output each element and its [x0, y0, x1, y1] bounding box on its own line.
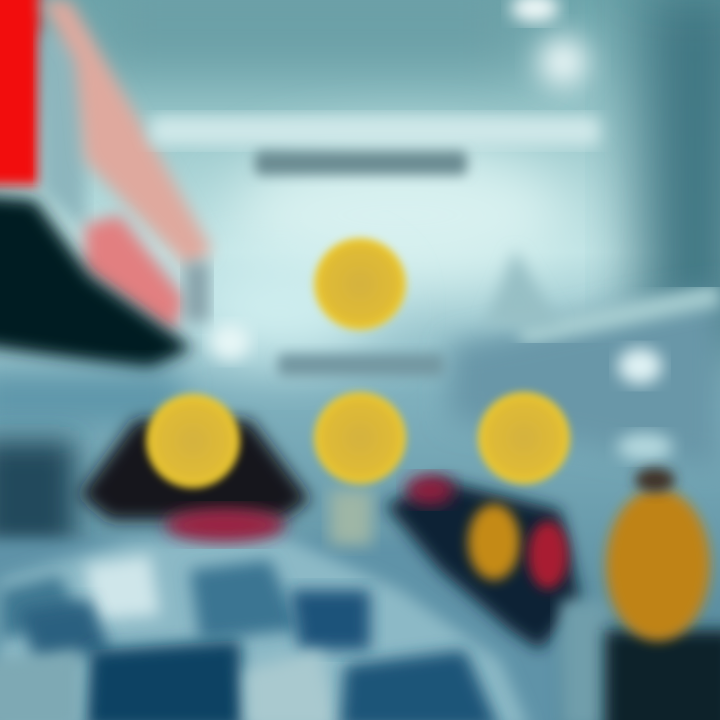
icon: centre yellow circle — [314, 392, 406, 484]
heading: blurred title band — [150, 116, 600, 146]
icon: top yellow circle — [314, 238, 406, 330]
icon: right yellow circle — [478, 392, 570, 484]
crowd and foreground — [0, 375, 720, 720]
icon: left yellow circle — [146, 394, 240, 488]
icon: faint triangle — [485, 250, 560, 325]
heading: blurred subtitle — [255, 151, 467, 175]
storefront sign: left — [0, 0, 250, 370]
caption: middle label — [278, 354, 444, 376]
